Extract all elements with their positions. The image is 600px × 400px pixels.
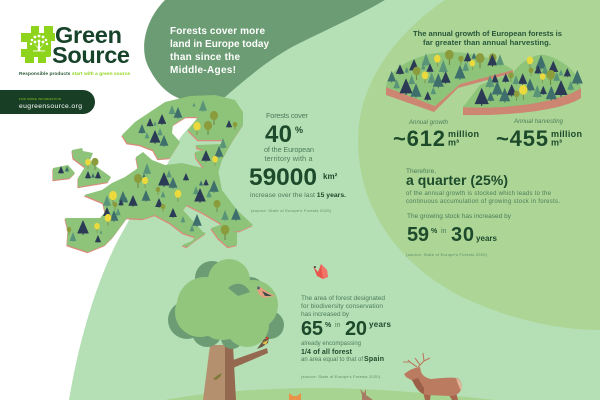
map of Europe with forests xyxy=(52,95,253,253)
website pill xyxy=(0,90,95,114)
text block: forest coverage: % xyxy=(295,125,303,135)
website pill: FOR MORE INFORMATION xyxy=(19,97,61,101)
text block: forest coverage: 59000 xyxy=(249,164,317,191)
stat: annual harvesting: ~455 xyxy=(496,126,548,151)
title: annual growth vs harvesting: far greater than annual harvesting. xyxy=(423,38,551,47)
deer chest xyxy=(412,378,424,394)
deer rump xyxy=(456,378,462,391)
headline xyxy=(170,26,269,76)
text block: biodiversity conservation xyxy=(301,295,392,379)
text block: forest coverage xyxy=(249,111,346,213)
text block: biodiversity conservation: in xyxy=(335,322,341,329)
illustration: fox ears xyxy=(289,393,301,400)
text block: biodiversity conservation: an area equal to that of xyxy=(301,357,363,363)
text block: forest coverage: of the European xyxy=(264,145,314,154)
growth plate trees xyxy=(387,50,504,101)
tree trunk and branch xyxy=(203,345,268,400)
logo: GreenSource xyxy=(19,22,130,77)
text block: biodiversity conservation: 1/4 of all forest xyxy=(301,349,353,356)
stat: annual growth xyxy=(393,120,479,151)
ground hill xyxy=(165,388,495,400)
stat: annual growth: Annual growth xyxy=(408,120,449,126)
stat: annual harvesting xyxy=(496,119,582,151)
text block: growing stock increase: in xyxy=(441,228,447,235)
tree canopy xyxy=(168,259,284,349)
stat: annual harvesting: m³ xyxy=(551,138,562,148)
text block: biodiversity conservation: 20 xyxy=(345,318,367,340)
dark green headline blob xyxy=(144,0,385,100)
map trees xyxy=(58,100,241,243)
text block: forest coverage: territory with a xyxy=(264,154,312,163)
text block: biodiversity conservation: (source: State of Europe's Forests 2020) xyxy=(301,374,381,379)
headline: Middle-Ages! xyxy=(170,65,236,76)
text block: biodiversity conservation: for biodiversity conservation xyxy=(301,303,383,310)
text block: growing stock increase: 30 xyxy=(451,224,474,246)
text block: forest coverage: Forests cover xyxy=(266,111,308,120)
stat: annual growth: ~612 xyxy=(393,126,445,151)
text block: biodiversity conservation: % xyxy=(325,322,332,329)
text block: forest coverage: km² xyxy=(323,172,338,181)
title: annual growth vs harvesting xyxy=(413,29,562,47)
icon: butterfly xyxy=(313,264,328,279)
text block: a quarter stocked: Therefore, xyxy=(406,168,436,175)
bird on canopy xyxy=(257,286,275,298)
title: annual growth vs harvesting: The annual growth of European forests is xyxy=(413,29,562,38)
text block: a quarter stocked: continuous accumulation of growing stock in forests. xyxy=(406,199,560,205)
text block: a quarter stocked xyxy=(406,168,560,205)
text block: biodiversity conservation: has increased by xyxy=(301,311,350,318)
grasshopper on trunk xyxy=(213,373,222,380)
text block: biodiversity conservation: already encompassing xyxy=(301,341,361,347)
deer antlers xyxy=(403,353,430,367)
text block: growing stock increase: % xyxy=(431,228,438,235)
text block: growing stock increase xyxy=(406,213,512,257)
headline: than since the xyxy=(170,52,240,63)
illustration: forest plate, annual harvesting xyxy=(463,55,583,115)
text block: biodiversity conservation: Spain xyxy=(364,356,384,363)
website pill: eugreensource.org xyxy=(19,103,82,110)
text block: growing stock increase: years xyxy=(476,234,498,243)
logo wordmark: Source xyxy=(52,42,130,68)
text block: forest coverage: (source: State of Europe's Forests 2020) xyxy=(251,208,332,213)
deer legs xyxy=(423,392,458,400)
deer body xyxy=(404,367,462,396)
text block: growing stock increase: The growing stock has increased by xyxy=(407,213,512,220)
bird on branch xyxy=(257,337,269,349)
headline: Forests cover more xyxy=(170,26,265,37)
text block: biodiversity conservation: years xyxy=(369,320,392,329)
logo tagline: Responsible products start with a green source xyxy=(19,71,130,77)
text block: a quarter stocked: a quarter (25%) xyxy=(406,172,508,188)
harvesting plate trees xyxy=(475,55,583,106)
text block: growing stock increase: 59 xyxy=(407,224,429,246)
text block: forest coverage: 40 xyxy=(265,121,292,148)
text block: forest coverage: increase over the last 15 years. xyxy=(250,192,346,199)
headline: land in Europe today xyxy=(170,39,269,50)
text block: biodiversity conservation: The area of forest designated xyxy=(301,295,385,302)
logo wordmark: Green xyxy=(55,22,122,48)
stat: annual growth: m³ xyxy=(448,138,459,148)
stat: annual harvesting: million xyxy=(551,129,582,139)
illustration: rabbit xyxy=(360,389,373,400)
big green circle panel xyxy=(358,0,600,330)
illustration: tree with birds xyxy=(168,259,284,400)
illustration: forest plate, annual growth xyxy=(386,50,513,112)
logo wordmark xyxy=(52,22,130,68)
icon: lime hash with tree xyxy=(21,26,55,63)
stat: annual growth: million xyxy=(448,129,479,139)
stat: annual harvesting: Annual harvesting xyxy=(513,119,564,125)
text block: growing stock increase: (source: State of Europe's Forests 2020) xyxy=(406,252,488,257)
text block: biodiversity conservation: 65 xyxy=(301,318,323,340)
text block: a quarter stocked: of the annual growth is stocked which leads to the xyxy=(406,191,552,197)
illustration: deer xyxy=(403,353,462,400)
